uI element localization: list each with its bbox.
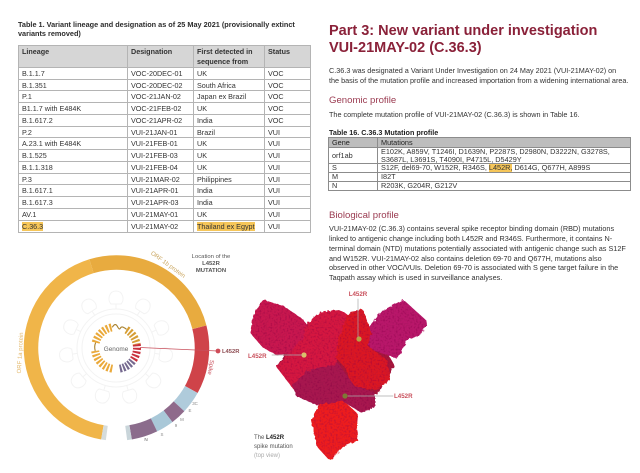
table 1 title: Table 1. Variant lineage and designation as of 25 May 2021 (provisionally extinct [18, 20, 295, 29]
outer genome ring [31, 262, 202, 433]
table 1: variant lineages: B.1.617.1 [22, 186, 53, 195]
intro paragraph [329, 66, 628, 85]
table 1: variant lineages: VUI-21JAN-01 [131, 128, 177, 136]
table 1: variant lineages: VOC [268, 116, 284, 125]
table 1: variant lineages: Lineage [22, 47, 49, 56]
biological profile text: and W152R. VUI-21MAY-02 also contains deletion 69-70 and Q677H, mutations also [329, 254, 602, 263]
table 1: variant lineages: P.2 [22, 128, 32, 136]
table 1: variant lineages [18, 45, 311, 233]
location caption: MUTATION [196, 268, 226, 274]
table 1: variant lineages: B.1.1.7 [22, 69, 45, 78]
table 1: variant lineages: Status [268, 47, 290, 56]
ring labels: E [189, 408, 192, 413]
table 1: variant lineages: UK [197, 69, 207, 78]
L452R pointer [140, 348, 240, 355]
protein surface [252, 302, 425, 458]
L452R callouts: L452R [349, 291, 368, 298]
table 1: variant lineages: Designation [131, 47, 172, 56]
table 1: variant lineages: VUI-21MAR-02 [131, 174, 180, 184]
ring labels: 9 [175, 423, 178, 428]
table 1: variant lineages: VUI-21APR-03 [131, 198, 179, 207]
table 16: mutation profile: I82T [381, 172, 396, 181]
table 1: variant lineages: Brazil [197, 128, 215, 136]
L452R callouts [248, 291, 413, 400]
table 16: mutation profile: M [332, 172, 338, 181]
ring labels: N [144, 437, 148, 442]
table 1: variant lineages: VUI-21MAY-01 [131, 210, 178, 219]
table 1: variant lineages: First detected in [197, 47, 253, 56]
ring labels: ORF 1b protein [149, 251, 186, 280]
table 1: variant lineages: India [197, 116, 213, 125]
table 1: variant lineages: UK [197, 104, 207, 113]
table 1: variant lineages: VUI [268, 151, 280, 160]
table 1: variant lineages: VUI [268, 186, 280, 195]
L452R pointer: L452R [222, 349, 240, 355]
table 1: variant lineages: Thailand ex Egypt [197, 222, 255, 231]
table 1: variant lineages: P.3 [22, 174, 32, 184]
spike caption: The L452R [254, 435, 284, 441]
table 16: mutation profile: orf1ab [332, 151, 353, 160]
intro paragraph: C.36.3 was designated a Variant Under Investigation on 24 May 2021 (VUI-21MAY-02) on [329, 66, 616, 75]
table 1: variant lineages: VOC-21JAN-02 [131, 92, 181, 101]
ring labels: 3C [192, 401, 198, 406]
location caption: L452R [202, 261, 221, 267]
table 1: variant lineages: B.1.617.3 [22, 198, 53, 207]
table 1: variant lineages: VUI [268, 139, 280, 148]
L452R callouts: L452R [394, 393, 413, 400]
table 1: variant lineages: VUI [268, 198, 280, 207]
virus outline [59, 291, 173, 405]
part 3 heading: Part 3: New variant under investigation [329, 23, 597, 39]
table 1: variant lineages: B.1.525 [22, 151, 47, 160]
table 16: mutation profile: S12F, del69-70, W152R, R346S, L452R, D614G, Q677H, A899S [381, 164, 590, 172]
table 1: variant lineages: Philippines [197, 174, 232, 184]
table 1: variant lineages: India [197, 198, 213, 207]
table 1: variant lineages: AV.1 [22, 210, 36, 219]
biological profile text: VUI-21MAY-02 (C.36.3) contains several spike receptor binding domain (RBD) mutations [329, 224, 614, 233]
table 1: variant lineages: UK [197, 139, 207, 148]
table 1 title [18, 20, 295, 38]
ring labels [17, 251, 214, 442]
table 1: variant lineages: B.1.1.318 [22, 163, 53, 172]
location caption: Location of the [192, 254, 231, 260]
biological profile text [329, 224, 626, 282]
genome label: Genome [104, 346, 129, 353]
table 1: variant lineages: VUI-21FEB-03 [131, 151, 178, 160]
table 16: mutation profile: Gene [332, 138, 350, 147]
table 1: variant lineages: India [197, 186, 213, 195]
biological profile heading: Biological profile [329, 210, 399, 221]
ring labels: M [180, 417, 184, 422]
biological profile text: terminal domain (NTD) mutations potentially associated with antigenic change such as S12F [329, 244, 626, 253]
table 1: variant lineages: sequence from [197, 57, 248, 66]
biological profile text: observed in other VOC/VUIs. Deletion 69-70 is associated with S gene target failure in the [329, 263, 618, 272]
table 16: mutation profile [328, 137, 631, 191]
table 1: variant lineages: P.1 [22, 92, 32, 101]
table 1: variant lineages: VUI-21FEB-04 [131, 163, 178, 172]
table 1: variant lineages: VOC [268, 92, 284, 101]
ring labels: S [161, 432, 164, 437]
table 1: variant lineages: VOC-20DEC-02 [131, 80, 183, 90]
table 1: variant lineages: VUI-21FEB-01 [131, 139, 178, 148]
spike caption: (top view) [254, 453, 280, 459]
table 16: mutation profile: Mutations [381, 138, 413, 147]
genomic profile heading: Genomic profile [329, 95, 396, 106]
table 1: variant lineages: B.1.351 [22, 80, 47, 90]
genome coil [95, 325, 137, 369]
table 1: variant lineages: VOC-20DEC-01 [131, 69, 183, 78]
table 16: mutation profile: S [332, 164, 337, 172]
spike caption: spike mutation [254, 444, 293, 450]
table 1: variant lineages: VOC-21APR-02 [131, 116, 182, 125]
table 1: variant lineages: UK [197, 151, 207, 160]
ring labels: ORF 1a protein [17, 332, 25, 374]
table 1: variant lineages: South Africa [197, 80, 236, 90]
table 1: variant lineages: UK [197, 210, 207, 219]
table 1: variant lineages: B.1.617.2 [22, 116, 53, 125]
genome ring diagram [16, 251, 240, 442]
table 1: variant lineages: B1.1.7 with E484K [22, 104, 81, 113]
table 1: variant lineages: VUI [268, 163, 280, 172]
ring labels: Spike [206, 359, 214, 376]
part 3 heading [329, 23, 597, 56]
L452R callouts: L452R [248, 353, 267, 360]
biological profile text: Taqpath assay which is used in surveillance analyses. [329, 273, 502, 282]
table 1: variant lineages: VOC [268, 80, 284, 90]
table 1: variant lineages: VUI [268, 222, 280, 231]
table 1: variant lineages: A.23.1 with E484K [22, 139, 81, 148]
L452R sites [301, 336, 362, 399]
table 1: variant lineages: VUI [268, 174, 280, 184]
biological profile text: linked to antigenic change including both L452R and R346S. Furthermore, it contains N- [329, 234, 612, 243]
table 1: variant lineages: VOC-21FEB-02 [131, 104, 181, 113]
table 1: variant lineages: VOC [268, 69, 284, 78]
table 1: variant lineages: VOC [268, 104, 284, 113]
table 1: variant lineages: Japan ex Brazil [197, 92, 246, 101]
intro paragraph: the basis of the mutation profile and increased importation from a widening international area. [329, 76, 628, 85]
part 3 heading: VUI-21MAY-02 (C.36.3) [329, 40, 482, 56]
spike protein structure [248, 291, 428, 460]
table 1 title: variants removed) [18, 29, 81, 38]
table 1: variant lineages: VUI-21MAY-02 [131, 222, 178, 231]
genomic profile text: The complete mutation profile of VUI-21MAY-02 (C.36.3) is shown in Table 16. [329, 110, 580, 119]
table 16 title: Table 16. C.36.3 Mutation profile [329, 128, 438, 137]
table 1: variant lineages: C.36.3 [22, 222, 43, 231]
table 1: variant lineages: VUI [268, 128, 280, 136]
table 1: variant lineages: VUI-21APR-01 [131, 186, 179, 195]
table 1: variant lineages: UK [197, 163, 207, 172]
table 1: variant lineages: VUI [268, 210, 280, 219]
